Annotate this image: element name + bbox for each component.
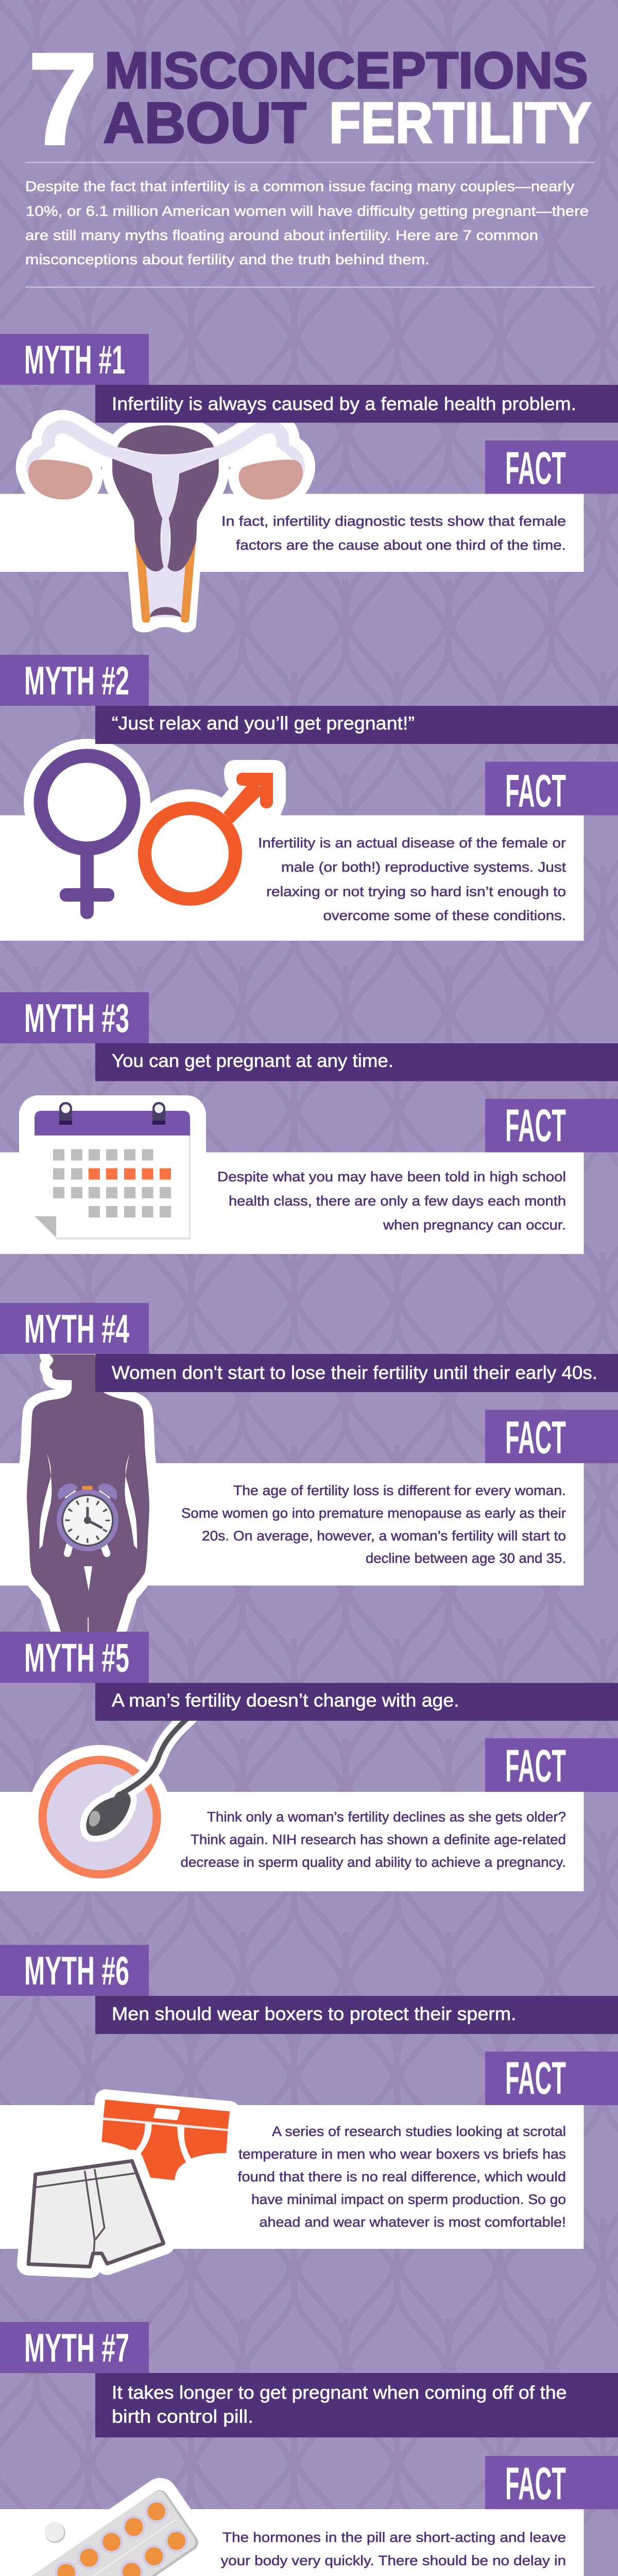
fact text: relaxing or not trying so hard isn’t enough to bbox=[266, 884, 566, 900]
fact text: Infertility is an actual disease of the female or bbox=[258, 835, 566, 851]
title: FERTILITY bbox=[329, 91, 591, 155]
myth statement bar bbox=[95, 1043, 618, 1081]
panel: myth 2 bbox=[0, 655, 618, 941]
panel: myth 7 bbox=[0, 2322, 618, 2576]
panel: myth 1 bbox=[0, 334, 618, 633]
myth badge: MYTH #6 bbox=[24, 1948, 129, 1993]
fact text: A series of research studies looking at scrotal bbox=[272, 2124, 566, 2139]
icon: sperm and egg bbox=[28, 1717, 189, 1889]
myth statement bar bbox=[95, 2373, 618, 2437]
fact text: temperature in men who wear boxers vs briefs has bbox=[238, 2146, 566, 2162]
fact text: health class, there are only a few days each month bbox=[229, 1193, 566, 1209]
myth statement bar: Women don't start to lose their fertility until their early 40s. bbox=[112, 1362, 597, 1383]
myth badge: MYTH #5 bbox=[24, 1635, 129, 1681]
intro text: Despite the fact that infertility is a common issue facing many couples—nearly bbox=[25, 178, 574, 194]
fact text bbox=[220, 2530, 566, 2576]
myth statement bar: “Just relax and you’ll get pregnant!” bbox=[112, 713, 415, 734]
myth statement bar bbox=[95, 385, 618, 422]
fact text: factors are the cause about one third of the time. bbox=[236, 537, 566, 553]
myth statement bar bbox=[95, 1996, 618, 2034]
icon: birth control blister pack bbox=[3, 2471, 269, 2576]
fact text: The hormones in the pill are short-acting and leave bbox=[222, 2530, 566, 2545]
myth badge bbox=[0, 1632, 149, 1683]
fact text bbox=[217, 1169, 566, 1233]
fact text: found that there is no real difference, which would bbox=[238, 2169, 566, 2184]
fact panel background bbox=[0, 2509, 584, 2576]
panel: myth 5 bbox=[0, 1632, 618, 1891]
intro text: 10%, or 6.1 million American women will have difficulty getting pregnant—there bbox=[26, 203, 589, 219]
myth badge bbox=[0, 334, 149, 385]
fact text: ahead and wear whatever is most comfortable! bbox=[260, 2214, 566, 2230]
fact text: when pregnancy can occur. bbox=[383, 1217, 566, 1233]
fact panel background bbox=[0, 1463, 584, 1586]
fact text: In fact, infertility diagnostic tests show that female bbox=[221, 513, 566, 529]
myth badge bbox=[0, 2322, 149, 2373]
myth statement bar: You can get pregnant at any time. bbox=[112, 1050, 393, 1071]
fact text: Despite what you may have been told in high school bbox=[217, 1169, 566, 1184]
fact text bbox=[181, 1483, 566, 1566]
fact panel background bbox=[0, 494, 584, 572]
myth statement bar: It takes longer to get pregnant when coming off of the bbox=[112, 2382, 566, 2403]
fact panel background bbox=[0, 815, 584, 941]
fact panel background bbox=[0, 1792, 584, 1891]
fact text: Some women go into premature menopause as early as their bbox=[181, 1505, 566, 1521]
panel: myth 3 bbox=[0, 992, 618, 1254]
fact text: decline between age 30 and 35. bbox=[366, 1551, 566, 1566]
title: MISCONCEPTIONS bbox=[105, 42, 588, 99]
icon: uterus bbox=[26, 420, 305, 633]
myth statement bar bbox=[95, 706, 618, 744]
fact text: The age of fertility loss is different for every woman. bbox=[233, 1483, 566, 1498]
title: 7 bbox=[28, 26, 98, 173]
intro text: misconceptions about fertility and the truth behind them. bbox=[25, 251, 430, 267]
myth statement bar bbox=[95, 1683, 618, 1721]
myth badge: MYTH #7 bbox=[24, 2325, 129, 2370]
title bbox=[28, 26, 591, 173]
fact text: your body very quickly. There should be no delay in bbox=[220, 2553, 566, 2568]
fact panel background bbox=[0, 1153, 584, 1254]
icon: female and male symbols bbox=[24, 739, 286, 919]
icon: calendar bbox=[19, 1095, 206, 1245]
fact text: overcome some of these conditions. bbox=[323, 908, 566, 923]
intro text: are still many myths floating around about infertility. Here are 7 common bbox=[25, 227, 538, 243]
icon: woman silhouette with clock bbox=[27, 1354, 149, 1632]
icon: briefs and boxers bbox=[28, 2099, 230, 2267]
myth badge: MYTH #4 bbox=[24, 1306, 129, 1351]
fact panel background bbox=[0, 2105, 584, 2249]
title: ABOUT bbox=[103, 91, 306, 155]
fact text bbox=[180, 1809, 566, 1870]
myth statement bar: Infertility is always caused by a female health problem. bbox=[112, 393, 576, 414]
myth badge: MYTH #1 bbox=[24, 337, 125, 382]
intro text bbox=[25, 178, 589, 267]
panel: myth 6 bbox=[0, 1945, 618, 2267]
fact text bbox=[221, 513, 566, 553]
myth statement bar: Men should wear boxers to protect their sperm. bbox=[112, 2003, 516, 2024]
fact text: male (or both!) reproductive systems. Just bbox=[281, 859, 566, 875]
fact text: Think only a woman’s fertility declines as she gets older? bbox=[207, 1809, 566, 1825]
fact text: 20s. On average, however, a woman’s fertility will start to bbox=[202, 1528, 566, 1544]
fact text bbox=[238, 2124, 566, 2230]
myth badge bbox=[0, 655, 149, 706]
myth badge bbox=[0, 1945, 149, 1996]
myth badge: MYTH #2 bbox=[24, 658, 129, 703]
myth badge: MYTH #3 bbox=[24, 995, 129, 1041]
fact text: have minimal impact on sperm production. So go bbox=[251, 2192, 566, 2207]
fact text: decrease in sperm quality and ability to achieve a pregnancy. bbox=[180, 1855, 566, 1870]
fact text: Think again. NIH research has shown a definite age-related bbox=[191, 1832, 566, 1848]
myth statement bar bbox=[95, 1354, 618, 1392]
fact text bbox=[258, 835, 566, 923]
myth badge bbox=[0, 1303, 149, 1354]
myth statement bar: birth control pill. bbox=[112, 2405, 253, 2427]
myth statement bar: A man’s fertility doesn’t change with age. bbox=[112, 1690, 459, 1710]
myth badge bbox=[0, 992, 149, 1043]
panel: myth 4 bbox=[0, 1303, 618, 1632]
